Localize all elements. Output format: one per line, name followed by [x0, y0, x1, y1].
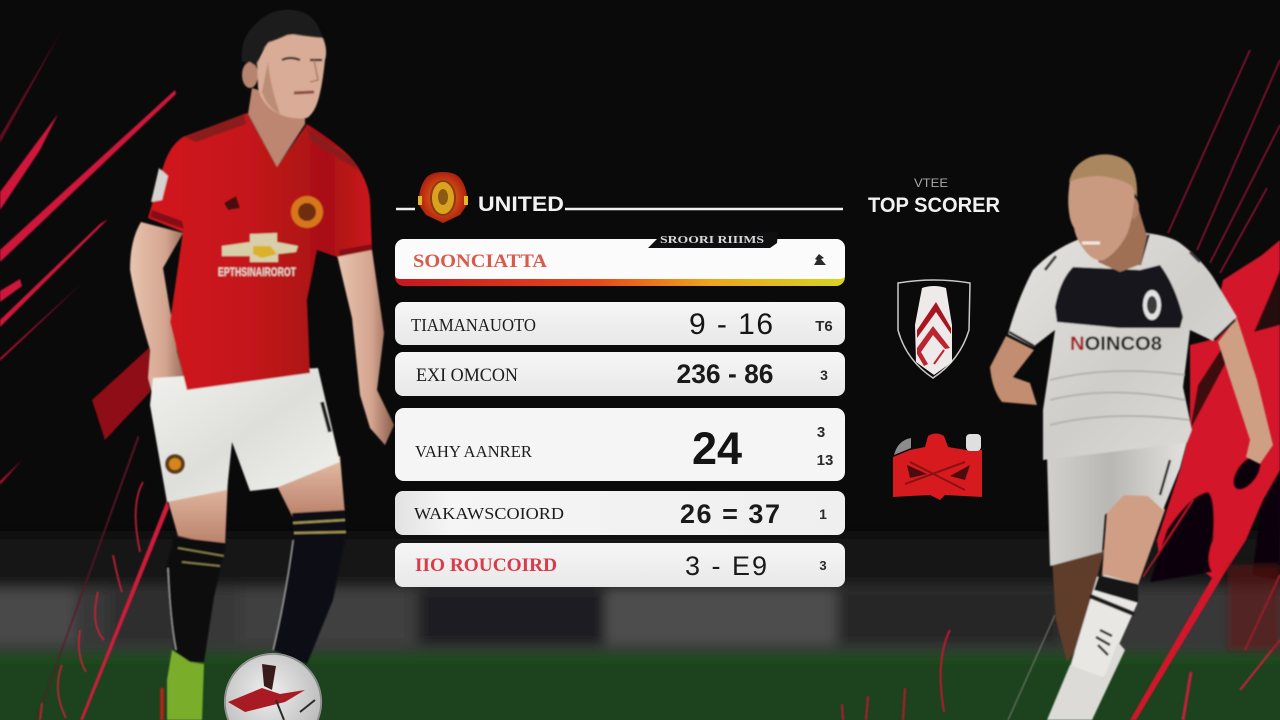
stat row 2: 3 [820, 367, 828, 383]
neck [248, 88, 305, 167]
red streaks and splash right [842, 50, 1280, 720]
stat row 3: 13 [817, 452, 833, 469]
player: United [130, 10, 394, 720]
stat row 3: VAHY AANRER [415, 442, 532, 461]
heading: top scorer: TOP SCORER [868, 194, 1000, 217]
player: United: EPTHSINAIROROT [218, 267, 296, 279]
stat row 2 [395, 352, 845, 396]
right arm [337, 250, 394, 445]
thighs [166, 478, 228, 546]
stat row 2: EXI OMCON [416, 365, 518, 386]
right arm [1218, 318, 1273, 464]
icon: United crest [418, 172, 468, 223]
stat row 4 [395, 491, 845, 535]
heading: top scorer [868, 176, 1000, 217]
stat row 5: 3 [819, 558, 827, 573]
pitch edge [0, 652, 1280, 720]
player: Fulham [990, 154, 1273, 720]
hair [1069, 154, 1137, 198]
stat row 1: T6 [815, 318, 833, 335]
icon: red emblem [893, 434, 982, 500]
stat row 5: 3 - E9 [685, 551, 767, 581]
stat row 2: 236 - 86 [676, 359, 774, 389]
player: Fulham: NOINCO8 [1070, 334, 1162, 355]
heading: United: UNITED [478, 192, 564, 216]
head [1068, 170, 1135, 260]
ear [242, 62, 258, 88]
back leg [1052, 550, 1104, 662]
shorts [150, 368, 340, 502]
label: SOONCIATTA [413, 251, 547, 272]
left arm [130, 222, 189, 422]
neck [1098, 200, 1147, 272]
heading: top scorer: VTEE [914, 176, 948, 190]
left arm [990, 336, 1037, 405]
table header row: SROORI RIIIMS [660, 234, 764, 246]
head [257, 34, 326, 118]
stat row 3 [395, 408, 845, 481]
header: United crest and rule [396, 172, 843, 223]
stat row 3: 3 [817, 424, 825, 441]
shorts [1047, 438, 1188, 566]
stat row 1 [395, 302, 845, 345]
icon: Fulham shield [898, 280, 970, 378]
stat row 1: TIAMANAUOTO [411, 315, 536, 335]
stat row 5 [395, 543, 845, 587]
boot [167, 650, 204, 720]
grass pitch [0, 664, 1280, 720]
red streaks left [0, 30, 176, 720]
jersey [148, 113, 372, 390]
stat row 5: IIO ROUCOIRD [415, 555, 557, 576]
socks [166, 537, 226, 662]
jersey [1008, 233, 1237, 460]
stat row 4: WAKAWSCOIORD [414, 504, 564, 523]
front leg [1102, 480, 1165, 585]
stat row 3: 24 [692, 423, 742, 474]
stat row 4: 26 = 37 [680, 499, 780, 529]
stat row 1: 9 - 16 [689, 308, 773, 341]
football [224, 653, 322, 720]
stat row 4: 1 [819, 506, 827, 522]
hair [242, 10, 323, 66]
stadium backdrop [0, 535, 1280, 720]
rule [396, 208, 843, 210]
icon: small marker [814, 254, 826, 265]
tab [648, 232, 778, 248]
table header row [395, 232, 845, 286]
boot [1047, 642, 1125, 720]
ear [1127, 197, 1139, 219]
sock [1070, 575, 1138, 678]
